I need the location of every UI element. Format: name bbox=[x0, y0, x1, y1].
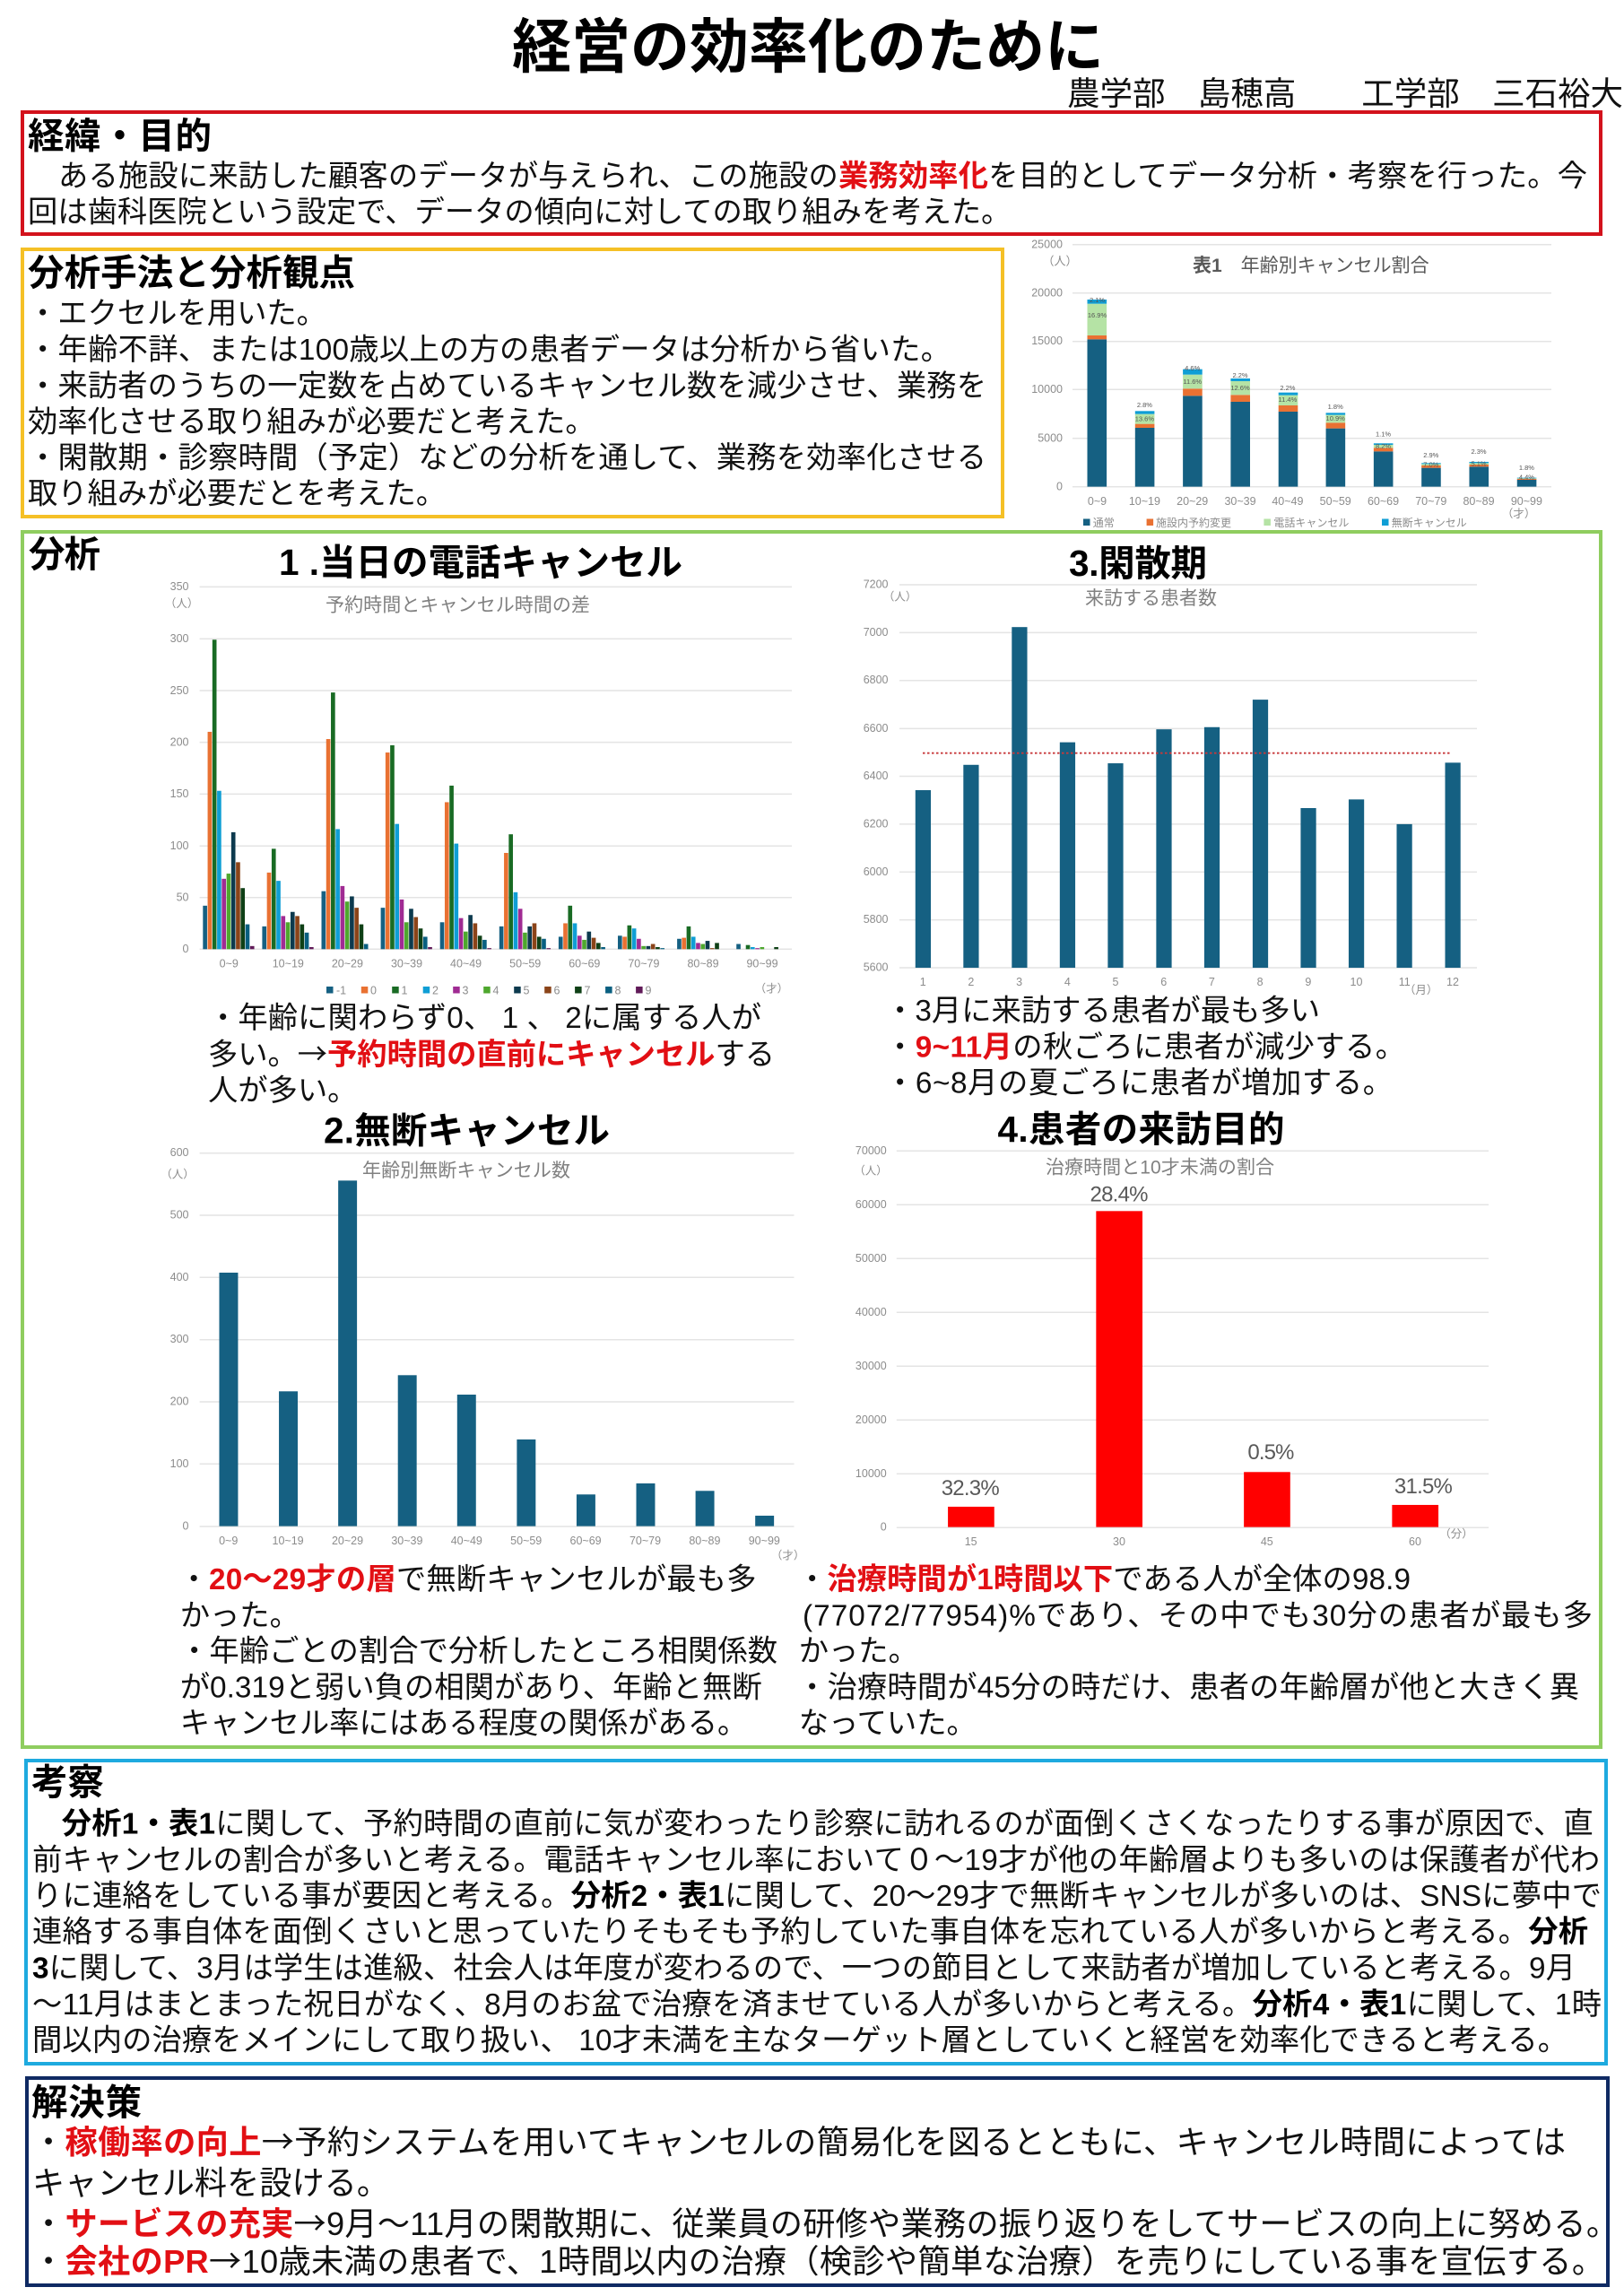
x axis labels: 50~59 bbox=[1320, 495, 1351, 508]
chart: no-show cancellations by age bbox=[161, 1146, 804, 1562]
chart: difference between appointment and cancel time: 40~49 bbox=[450, 958, 482, 970]
heading: section 3: 3.閑散期 bbox=[1069, 543, 1207, 584]
percentage labels: 2.9% bbox=[1423, 451, 1439, 459]
text: section 4 findings: なっていた。 bbox=[799, 1708, 977, 1740]
section 2: no-show cancellation bbox=[161, 1110, 804, 1740]
chart: no-show cancellations by age: 年齢別無断キャンセル数 bbox=[362, 1161, 570, 1181]
chart: visiting patients per month: 5800 bbox=[864, 913, 889, 926]
legend: 無断キャンセル bbox=[1392, 516, 1467, 529]
percentage labels: 8.2% bbox=[1376, 442, 1391, 450]
x axis labels: 70~79 bbox=[1415, 495, 1446, 508]
text: section 1 findings: ・年齢に関わらず0、 1 、 2に属する人が bbox=[208, 1002, 761, 1035]
x axis labels: 30~39 bbox=[1224, 495, 1256, 508]
chart: no-show cancellations by age: 300 bbox=[170, 1333, 189, 1345]
section 3: slow season bbox=[864, 543, 1477, 1100]
chart: treatment time and share of under-10s: 60 bbox=[1409, 1535, 1421, 1548]
chart: treatment time and share of under-10s: 32.3% bbox=[942, 1476, 1000, 1500]
text: analysis method: ・閑散期・診察時間（予定）などの分析を通して、業務を効率化させる bbox=[28, 441, 986, 475]
chart: no-show cancellations by age: 0~9 bbox=[219, 1535, 238, 1547]
text: background and purpose bbox=[28, 161, 1587, 230]
chart: difference between appointment and cancel time bbox=[165, 580, 792, 997]
chart: visiting patients per month: 10 bbox=[1350, 976, 1362, 988]
chart: visiting patients per month: 7000 bbox=[864, 626, 889, 639]
chart: no-show cancellations by age: 10~19 bbox=[273, 1535, 304, 1547]
text: discussion: 3に関して、3月は学生は進級、社会人は年度が変わるので、一つの節目として来訪者が増加していると考える。9月 bbox=[32, 1952, 1576, 1986]
section 1: same-day phone cancellation bbox=[165, 542, 792, 1108]
percentage labels: 5.1% bbox=[1471, 459, 1487, 468]
chart: visiting patients per month: 2 bbox=[968, 976, 974, 988]
text: analysis method bbox=[28, 298, 986, 511]
chart: no-show cancellations by age: 0 bbox=[183, 1519, 189, 1532]
chart: difference between appointment and cancel time: 30~39 bbox=[391, 958, 422, 970]
panel: solutions bbox=[27, 2078, 1619, 2285]
chart: visiting patients per month: 3 bbox=[1016, 976, 1022, 988]
legend: 電話キャンセル bbox=[1273, 517, 1349, 529]
chart: visiting patients per month: 5600 bbox=[864, 961, 889, 974]
chart: difference between appointment and cancel time: 0 bbox=[183, 943, 189, 955]
chart: treatment time and share of under-10s: 60000 bbox=[855, 1198, 887, 1211]
chart: difference between appointment and cancel time: 80~89 bbox=[687, 958, 719, 970]
chart: difference between appointment and cancel time: 150 bbox=[170, 787, 189, 800]
text: section 2 findings: が0.319と弱い負の相関があり、年齢と無断 bbox=[180, 1672, 762, 1704]
heading: solutions: 解決策 bbox=[31, 2082, 142, 2123]
panel: analysis method bbox=[22, 249, 1003, 517]
chart: difference between appointment and cancel time: 350 bbox=[170, 580, 189, 593]
percentage labels: 12.6% bbox=[1230, 384, 1250, 392]
text: discussion bbox=[32, 1808, 1602, 2057]
chart: treatment time and share of under-10s: （分） bbox=[1439, 1528, 1473, 1541]
legend: 施設内予約変更 bbox=[1156, 516, 1231, 529]
percentage labels: 4.6% bbox=[1185, 364, 1201, 372]
text: section 4 findings: ・治療時間が1時間以下である人が全体の98.9 bbox=[797, 1562, 1411, 1596]
text: analysis method: ・エクセルを用いた。 bbox=[28, 298, 326, 330]
legend: minutes: 7 bbox=[585, 985, 590, 997]
text: background and purpose: 回は歯科医院という設定で、データの傾向に対しての取り組みを考えた。 bbox=[28, 196, 1011, 230]
chart: no-show cancellations by age: 30~39 bbox=[391, 1535, 423, 1547]
chart: treatment time and share of under-10s bbox=[854, 1144, 1489, 1548]
chart: treatment time and share of under-10s: 40000 bbox=[855, 1306, 887, 1318]
text: section 2 findings: キャンセル率にはある程度の関係がある。 bbox=[180, 1708, 747, 1740]
chart: difference between appointment and cancel time: 100 bbox=[170, 839, 189, 852]
percentage labels: 16.9% bbox=[1088, 311, 1107, 319]
chart: visiting patients per month: 6800 bbox=[864, 674, 889, 686]
legend: minutes: 0 bbox=[370, 985, 377, 997]
percentage labels: 1.1% bbox=[1376, 430, 1391, 438]
legend: minutes: 8 bbox=[615, 985, 621, 997]
chart: difference between appointment and cancel time: 90~99 bbox=[746, 958, 778, 970]
title: 経営の効率化のために bbox=[512, 13, 1104, 80]
percentage labels: 2.1% bbox=[1090, 296, 1105, 304]
percentage labels: 4.4% bbox=[1519, 474, 1534, 481]
percentage labels: 1.8% bbox=[1519, 464, 1534, 472]
chart: visiting patients per month: 7200 bbox=[864, 578, 889, 590]
chart: visiting patients per month: 12 bbox=[1446, 976, 1459, 988]
section 4: purpose of patient visits bbox=[797, 1109, 1593, 1740]
chart: difference between appointment and cancel time: 300 bbox=[170, 632, 189, 645]
stacked bars bbox=[1088, 300, 1536, 487]
text: discussion: 分析1・表1に関して、予約時間の直前に気が変わったり診察に訪れるのが面倒くさくなったりする事が原因で、直 bbox=[62, 1808, 1594, 1840]
chart: visiting patients per month: （人） bbox=[883, 590, 916, 603]
x axis labels: （才） bbox=[1502, 508, 1535, 520]
chart: difference between appointment and cancel time: 10~19 bbox=[273, 958, 304, 970]
percentage labels: 2.2% bbox=[1232, 371, 1248, 379]
chart: table 1 cancellation ratio by age: 15000 bbox=[1031, 335, 1063, 347]
text: section 3 findings: ・9~11月の秋ごろに患者が減少する。 bbox=[885, 1031, 1405, 1064]
text: section 4 findings: かった。 bbox=[799, 1635, 918, 1668]
chart: treatment time and share of under-10s: 治療時間と10才未満の割合 bbox=[1046, 1157, 1274, 1178]
legend: minutes: 9 bbox=[646, 985, 651, 997]
chart: visiting patients per month: 6200 bbox=[864, 818, 889, 831]
text: background and purpose: ある施設に来訪した顧客のデータが与えられ、この施設の業務効率化を目的としてデータ分析・考察を行った。今 bbox=[58, 161, 1587, 194]
chart: difference between appointment and cancel time: 予約時間とキャンセル時間の差 bbox=[326, 596, 590, 615]
text: analysis method: 効率化させる取り組みが必要だと考えた。 bbox=[28, 405, 595, 439]
chart: table 1 cancellation ratio by age: （人） bbox=[1042, 255, 1078, 267]
panel: background and purpose bbox=[22, 112, 1601, 234]
legend: 通常 bbox=[1093, 517, 1115, 529]
text: discussion: ～11月はまとまった祝日がなく、8月のお盆で治療を済ませている人が多いからと考える。分析4・表1に関して、1時 bbox=[32, 1988, 1602, 2022]
legend: minutes: 2 bbox=[432, 985, 439, 997]
text: section 1 findings bbox=[208, 1002, 775, 1108]
chart: no-show cancellations by age: 400 bbox=[170, 1271, 189, 1283]
chart: treatment time and share of under-10s: 10000 bbox=[855, 1467, 887, 1480]
percentage labels: 10.9% bbox=[1326, 414, 1345, 422]
chart: difference between appointment and cancel time: 60~69 bbox=[569, 958, 600, 970]
text: section 2 findings: ・20～29才の層で無断キャンセルが最も多 bbox=[179, 1563, 757, 1596]
text: solutions: キャンセル料を設ける。 bbox=[32, 2165, 389, 2201]
chart: no-show cancellations by age: 200 bbox=[170, 1396, 189, 1408]
chart: treatment time and share of under-10s: （人） bbox=[854, 1164, 888, 1177]
chart: difference between appointment and cancel time: 70~79 bbox=[628, 958, 660, 970]
chart: treatment time and share of under-10s: 30 bbox=[1113, 1535, 1125, 1548]
heading: analysis method: 分析手法と分析観点 bbox=[28, 252, 355, 293]
text: analysis method: ・来訪者のうちの一定数を占めているキャンセル数を減少させ、業務を bbox=[28, 370, 986, 404]
x axis labels: 90~99 bbox=[1511, 495, 1542, 508]
legend: minutes: 4 bbox=[493, 985, 499, 997]
text: section 3 findings: ・3月に来訪する患者が最も多い bbox=[885, 995, 1320, 1028]
chart: visiting patients per month: 4 bbox=[1064, 976, 1071, 988]
chart: treatment time and share of under-10s: 45 bbox=[1261, 1535, 1273, 1548]
percentage labels: 11.6% bbox=[1183, 378, 1202, 386]
heading: section 1: 1 .当日の電話キャンセル bbox=[279, 542, 682, 583]
chart: visiting patients per month: 8 bbox=[1257, 976, 1264, 988]
heading: section 2: 2.無断キャンセル bbox=[324, 1110, 610, 1152]
text: discussion: 間以内の治療をメインにして取り扱い、 10才未満を主なターゲット層としていくと経営を効率化できると考える。 bbox=[32, 2024, 1568, 2057]
chart: visiting patients per month: 6 bbox=[1160, 976, 1167, 988]
panel: discussion bbox=[26, 1761, 1606, 2064]
chart: visiting patients per month bbox=[864, 578, 1477, 996]
chart: visiting patients per month: 7 bbox=[1209, 976, 1215, 988]
x axis labels bbox=[1088, 495, 1542, 520]
chart: treatment time and share of under-10s: 28.4% bbox=[1090, 1182, 1148, 1207]
heading: analysis: 分析 bbox=[29, 534, 100, 575]
chart: visiting patients per month: 1 bbox=[920, 976, 926, 988]
chart: visiting patients per month: 来訪する患者数 bbox=[1085, 588, 1217, 609]
chart: no-show cancellations by age: 70~79 bbox=[630, 1535, 661, 1547]
text: discussion: りに連絡をしている事が要因と考える。分析2・表1に関して、20～29才で無断キャンセルが多いのは、SNSに夢中で bbox=[32, 1880, 1602, 1913]
chart: visiting patients per month: 6600 bbox=[864, 722, 889, 735]
text: solutions: ・サービスの充実→9月～11月の閑散期に、従業員の研修や業務の振り返りをしてサービスの向上に努める。 bbox=[32, 2198, 1619, 2245]
heading: background and purpose: 経緯・目的 bbox=[28, 115, 212, 156]
chart: treatment time and share of under-10s: 0 bbox=[881, 1521, 887, 1534]
text: section 2 findings: かった。 bbox=[180, 1600, 300, 1632]
text: discussion: 前キャンセルの割合が多いと考える。電話キャンセル率において０～19才が他の年齢層よりも多いのは保護者が代わ bbox=[32, 1844, 1600, 1877]
legend: minutes: -1 bbox=[336, 985, 346, 997]
chart: difference between appointment and cancel time: 20~29 bbox=[332, 958, 363, 970]
chart: treatment time and share of under-10s: 50000 bbox=[855, 1252, 887, 1265]
x axis labels: 10~19 bbox=[1129, 495, 1160, 508]
chart title: table 1: 表1 年齢別キャンセル割合 bbox=[1193, 256, 1429, 276]
chart: visiting patients per month: （月） bbox=[1404, 984, 1437, 996]
text: solutions bbox=[32, 2117, 1619, 2283]
chart: visiting patients per month: 6400 bbox=[864, 770, 889, 782]
percentage labels: 2.2% bbox=[1280, 384, 1296, 392]
percentage labels bbox=[1088, 296, 1534, 481]
legend: minutes: 6 bbox=[554, 985, 560, 997]
chart: treatment time and share of under-10s: 20000 bbox=[855, 1413, 887, 1426]
x axis labels: 80~89 bbox=[1463, 495, 1495, 508]
chart: difference between appointment and cancel time: 250 bbox=[170, 684, 189, 697]
chart: visiting patients per month: 5 bbox=[1113, 976, 1119, 988]
chart: table 1 cancellation ratio by age: 10000 bbox=[1031, 383, 1063, 396]
text: section 1 findings: 人が多い。 bbox=[208, 1074, 357, 1108]
text: analysis method: ・年齢不詳、または100歳以上の方の患者データは分析から省いた。 bbox=[28, 334, 951, 367]
chart: treatment time and share of under-10s: 15 bbox=[965, 1535, 977, 1548]
chart: no-show cancellations by age: 50~59 bbox=[510, 1535, 542, 1547]
authors: 農学部 島穂高 工学部 三石裕大 bbox=[1067, 75, 1623, 112]
chart: table 1 cancellation ratio by age: 25000 bbox=[1031, 239, 1063, 251]
text: solutions: ・会社のPR→10歳未満の患者で、1時間以内の治療（検診や簡単な治療）を売りにしている事を宣伝する。 bbox=[32, 2236, 1604, 2283]
chart: no-show cancellations by age: 60~69 bbox=[570, 1535, 602, 1547]
percentage labels: 1.8% bbox=[1328, 403, 1343, 411]
x axis labels: 0~9 bbox=[1088, 495, 1107, 508]
text: solutions: ・稼働率の向上→予約システムを用いてキャンセルの簡易化を図るとともに、キャンセル時間によっては bbox=[32, 2117, 1566, 2163]
text: section 2 findings bbox=[179, 1563, 777, 1740]
text: section 3 findings: ・6~8月の夏ごろに患者が増加する。 bbox=[885, 1067, 1393, 1100]
chart: no-show cancellations by age: （人） bbox=[161, 1168, 195, 1180]
chart: visiting patients per month: 9 bbox=[1305, 976, 1311, 988]
text: section 2 findings: ・年齢ごとの割合で分析したところ相関係数 bbox=[179, 1635, 777, 1668]
chart: treatment time and share of under-10s: 31.5% bbox=[1394, 1474, 1453, 1499]
chart: no-show cancellations by age: 90~99 bbox=[749, 1535, 780, 1547]
legend: minutes bbox=[326, 985, 651, 997]
percentage labels: 2.8% bbox=[1137, 401, 1152, 409]
chart: difference between appointment and cancel time: 50 bbox=[177, 891, 189, 904]
percentage labels: 13.6% bbox=[1135, 414, 1154, 423]
chart: no-show cancellations by age: 80~89 bbox=[689, 1535, 721, 1547]
percentage labels: 11.4% bbox=[1279, 396, 1298, 404]
chart: no-show cancellations by age: 20~29 bbox=[332, 1535, 363, 1547]
chart: table 1 cancellation ratio by age: 0 bbox=[1056, 481, 1063, 493]
legend: minutes: 3 bbox=[463, 985, 468, 997]
percentage labels: 2.3% bbox=[1471, 448, 1487, 456]
chart: difference between appointment and cancel time: 200 bbox=[170, 735, 189, 748]
chart: no-show cancellations by age: （才） bbox=[771, 1550, 804, 1562]
legend bbox=[1083, 516, 1467, 529]
chart: difference between appointment and cancel time: （人） bbox=[165, 597, 198, 610]
chart: no-show cancellations by age: 600 bbox=[170, 1146, 189, 1159]
text: discussion: 連絡する事自体を面倒くさいと思っていたりそもそも予約していた事自体を忘れている人が多いからと考える。分析 bbox=[32, 1916, 1588, 1949]
text: section 3 findings bbox=[885, 995, 1405, 1100]
text: analysis method: 取り組みが必要だとを考えた。 bbox=[28, 477, 446, 511]
text: section 4 findings: (77072/77954)%であり、その中でも30分の患者が最も多 bbox=[803, 1600, 1593, 1632]
chart: visiting patients per month: 11 bbox=[1399, 976, 1411, 988]
chart: no-show cancellations by age: 100 bbox=[170, 1457, 189, 1470]
chart: treatment time and share of under-10s: 0.5% bbox=[1247, 1440, 1294, 1465]
panel: analysis bbox=[22, 532, 1601, 1747]
chart: difference between appointment and cancel time: 50~59 bbox=[509, 958, 541, 970]
text: section 4 findings: ・治療時間が45分の時だけ、患者の年齢層が他と大きく異 bbox=[797, 1672, 1579, 1704]
heading: discussion: 考察 bbox=[31, 1761, 104, 1803]
text: section 1 findings: 多い。→予約時間の直前にキャンセルする bbox=[208, 1030, 775, 1074]
chart: treatment time and share of under-10s: 30000 bbox=[855, 1360, 887, 1372]
legend: minutes: 5 bbox=[524, 985, 529, 997]
chart: table 1 cancellation ratio by age bbox=[1031, 239, 1551, 529]
chart: difference between appointment and cancel time: （才） bbox=[755, 983, 788, 996]
chart: visiting patients per month: 6000 bbox=[864, 865, 889, 878]
chart: table 1 cancellation ratio by age: 20000 bbox=[1031, 287, 1063, 300]
chart: difference between appointment and cancel time: 0~9 bbox=[220, 958, 239, 970]
heading: section 4: 4.患者の来訪目的 bbox=[997, 1109, 1284, 1150]
text: section 4 findings bbox=[797, 1562, 1593, 1740]
legend: minutes: 1 bbox=[402, 985, 407, 997]
chart: no-show cancellations by age: 500 bbox=[170, 1209, 189, 1222]
percentage labels: 7.0% bbox=[1423, 461, 1439, 468]
x axis labels: 60~69 bbox=[1368, 495, 1399, 508]
x axis labels: 40~49 bbox=[1272, 495, 1304, 508]
chart: table 1 cancellation ratio by age: 5000 bbox=[1038, 432, 1063, 445]
chart: treatment time and share of under-10s: 70000 bbox=[855, 1144, 887, 1157]
chart: no-show cancellations by age: 40~49 bbox=[451, 1535, 482, 1547]
x axis labels: 20~29 bbox=[1177, 495, 1208, 508]
